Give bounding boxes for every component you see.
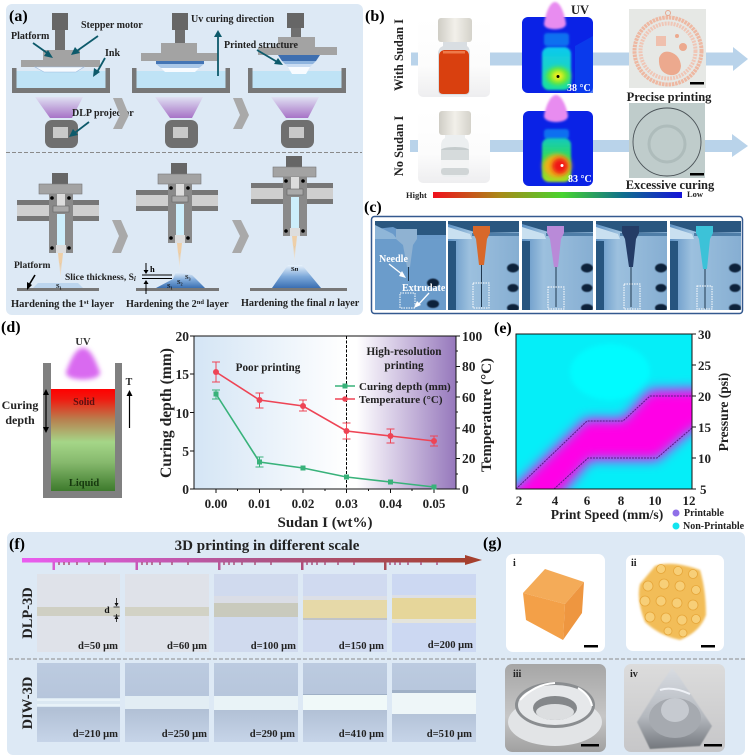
x axis labels bbox=[205, 496, 446, 511]
DIW printer layer 2: h bbox=[150, 264, 155, 274]
DIW annotations: Platform bbox=[14, 261, 50, 271]
curing vessel schematic: Liquid bbox=[69, 478, 99, 489]
method labels: DIW-3D bbox=[20, 677, 36, 729]
speed labels bbox=[516, 493, 696, 508]
y axis labels right: 60 bbox=[462, 390, 476, 405]
temperature color bar: Low bbox=[687, 189, 704, 199]
UV label: UV bbox=[571, 3, 589, 17]
y axis labels right: 0 bbox=[462, 482, 469, 497]
flow arrow with Sudan I bbox=[411, 47, 748, 71]
row labels: With Sudan I bbox=[392, 19, 406, 91]
precise print photo bbox=[629, 9, 706, 88]
DIW printer layer 2: S₂ bbox=[177, 279, 183, 286]
diameter labels: d=100 μm bbox=[251, 641, 296, 652]
panel label f: (f) bbox=[9, 536, 25, 553]
DLP printer stage 3 bbox=[248, 13, 346, 148]
pressure labels bbox=[698, 327, 712, 497]
y axis labels left bbox=[176, 329, 189, 497]
DIW printer layer 1 bbox=[17, 173, 99, 291]
photo i: orange cube: i bbox=[513, 558, 516, 569]
method labels bbox=[20, 587, 36, 729]
x axis labels: 0.03 bbox=[335, 496, 358, 511]
diameter labels bbox=[73, 640, 473, 740]
DLP printer stage 1 bbox=[12, 13, 110, 148]
panel label g: (g) bbox=[483, 535, 502, 552]
diameter labels: d=50 μm bbox=[78, 641, 118, 652]
y axis labels right: 40 bbox=[462, 421, 476, 436]
photo iv: clear cone bbox=[624, 664, 725, 752]
axis titles: Sudan I (wt%) bbox=[277, 515, 373, 531]
red vial photo bbox=[418, 18, 490, 97]
DLP annotations bbox=[11, 14, 299, 119]
chart legend bbox=[335, 381, 451, 406]
photo: orange needle bbox=[448, 221, 519, 312]
flow arrow no Sudan I bbox=[410, 134, 748, 157]
x axis labels: 0.00 bbox=[205, 496, 227, 511]
panel f: print resolution bbox=[9, 536, 482, 742]
y axis labels right: 80 bbox=[462, 359, 476, 374]
DIW printer layer 1: S₁ bbox=[56, 283, 62, 290]
pressure labels: 5 bbox=[700, 482, 707, 497]
speed labels: 10 bbox=[648, 493, 662, 508]
DLP printer stage 2 bbox=[132, 13, 230, 148]
panel label a: (a) bbox=[9, 8, 28, 25]
process chevrons bbox=[112, 98, 249, 253]
diameter labels: d=510 μm bbox=[427, 729, 472, 740]
panel a: DLP and DIW printing process bbox=[6, 4, 363, 315]
photo: clear needle: Extrudate bbox=[402, 283, 446, 294]
heatmap legend bbox=[672, 508, 745, 532]
DIW annotations: st bbox=[84, 299, 89, 306]
photo ii: lattice cube bbox=[626, 555, 724, 651]
DLP annotations: Uv curing direction bbox=[191, 14, 275, 25]
x axis labels: 0.05 bbox=[423, 496, 446, 511]
DIW printer layer 2 bbox=[136, 163, 219, 294]
panel b: thermal comparison bbox=[365, 2, 748, 200]
DLP annotations: Printed structure bbox=[224, 40, 299, 51]
speed labels: 6 bbox=[584, 493, 591, 508]
diameter labels: d=200 μm bbox=[428, 640, 473, 651]
speed labels: 8 bbox=[618, 493, 625, 508]
DIW annotations: layer bbox=[204, 299, 229, 310]
chart legend: Temperature (°C) bbox=[359, 394, 443, 406]
DIW annotations: i bbox=[134, 275, 136, 283]
panel f and g background bbox=[7, 532, 745, 755]
photo: cyan needle bbox=[670, 221, 741, 312]
diameter labels: d=290 μm bbox=[250, 729, 295, 740]
temperature color bar bbox=[406, 189, 704, 200]
panel e: printable window heatmap bbox=[480, 320, 745, 532]
photo iv: clear cone: iv bbox=[630, 669, 638, 680]
heatmap axis ticks bbox=[692, 334, 696, 489]
heatmap axis titles: Print Speed (mm/s) bbox=[551, 507, 663, 523]
temperature color bar: Hight bbox=[406, 190, 427, 200]
DIW annotations: nd bbox=[197, 299, 204, 306]
panel label c: (c) bbox=[364, 199, 382, 216]
y axis labels right bbox=[462, 329, 482, 497]
diameter marker bbox=[104, 598, 120, 622]
photo: clear needle bbox=[375, 221, 446, 310]
speed labels: 12 bbox=[682, 493, 696, 508]
photo: purple needle bbox=[522, 221, 593, 312]
curing vessel schematic: Curing bbox=[2, 398, 38, 412]
y axis labels left: 20 bbox=[176, 329, 189, 344]
DLP annotations: Ink bbox=[105, 48, 120, 59]
y axis labels right: 100 bbox=[462, 329, 482, 344]
panel f title: 3D printing in different scale bbox=[175, 538, 360, 554]
diameter labels: d=150 μm bbox=[339, 641, 384, 652]
diameter marker: d bbox=[104, 606, 110, 616]
thermal image 38 C bbox=[522, 2, 593, 94]
DIW printer final layer bbox=[250, 156, 347, 291]
panel c: extrusion photos bbox=[364, 199, 742, 314]
y axis labels left: 15 bbox=[176, 367, 189, 382]
heatmap bbox=[516, 334, 692, 490]
precise printing caption: Precise printing bbox=[627, 90, 712, 104]
region labels bbox=[236, 346, 442, 374]
method labels: DLP-3D bbox=[20, 587, 36, 639]
y axis labels left: 10 bbox=[176, 406, 189, 421]
photo i: orange cube bbox=[506, 554, 605, 652]
DIW annotations bbox=[11, 261, 360, 310]
heatmap legend: Printable bbox=[684, 508, 725, 519]
panel d: curing depth bbox=[1, 319, 495, 531]
photo: dark blue needle bbox=[596, 221, 667, 312]
DIW printer final layer: Sn bbox=[291, 266, 299, 273]
curing vessel schematic: Solid bbox=[73, 397, 95, 408]
x axis labels: 0.02 bbox=[292, 496, 314, 511]
photo iii: clear ring: iii bbox=[513, 669, 522, 680]
photo ii: lattice cube: ii bbox=[631, 558, 637, 569]
y axis labels right: 20 bbox=[462, 451, 476, 466]
thermal image 38 C: 38 °C bbox=[567, 83, 591, 94]
DIW micrographs bbox=[37, 663, 476, 742]
speed labels: 4 bbox=[552, 493, 559, 508]
scale arrow bbox=[22, 555, 482, 570]
row labels: No Sudan I bbox=[392, 116, 406, 176]
axis titles: Curing depth (mm) bbox=[158, 348, 175, 478]
DIW printer layer 2: S₁ bbox=[167, 283, 173, 290]
DLP annotations: DLP projector bbox=[72, 108, 134, 119]
pressure labels: 30 bbox=[698, 327, 711, 342]
diameter labels: d=210 μm bbox=[73, 729, 118, 740]
axis titles bbox=[158, 348, 495, 531]
panel g: printed objects bbox=[483, 535, 725, 752]
DIW annotations: Hardening the 2 bbox=[126, 299, 197, 310]
DIW annotations: Slice thickness, S bbox=[65, 273, 134, 283]
DIW annotations: layer bbox=[89, 299, 114, 310]
photo iii: clear ring bbox=[505, 664, 606, 752]
annotation arrows bbox=[33, 30, 283, 137]
pressure axis title: Pressure (psi) bbox=[716, 373, 731, 451]
y axis labels left: 5 bbox=[182, 444, 189, 459]
panel label d: (d) bbox=[1, 319, 21, 336]
curing vessel schematic: depth bbox=[5, 413, 35, 427]
excessive curing photo bbox=[629, 103, 705, 178]
thermal image 83 C bbox=[523, 95, 593, 186]
x axis labels: 0.04 bbox=[379, 496, 402, 511]
pressure labels: 15 bbox=[698, 420, 712, 435]
curing vessel schematic: T bbox=[126, 377, 133, 388]
curing depth series bbox=[212, 390, 436, 490]
excessive curing caption: Excessive curing bbox=[626, 178, 715, 192]
region labels: Poor printing bbox=[236, 362, 301, 374]
pressure labels: 10 bbox=[698, 451, 711, 466]
pressure labels: 25 bbox=[698, 358, 712, 373]
DLP annotations: Stepper motor bbox=[81, 20, 143, 31]
region labels: High-resolution bbox=[366, 346, 442, 358]
clear vial photo bbox=[418, 110, 490, 183]
DIW annotations: Hardening the final n layer bbox=[241, 298, 360, 309]
speed labels: 2 bbox=[516, 493, 522, 508]
DIW annotations: Hardening the 1 bbox=[11, 299, 84, 310]
line chart bbox=[158, 329, 495, 531]
x axis labels: 0.01 bbox=[248, 496, 271, 511]
region labels: printing bbox=[384, 360, 424, 372]
panel label e: (e) bbox=[494, 320, 512, 337]
diameter labels: d=250 μm bbox=[162, 729, 207, 740]
DLP micrographs bbox=[37, 574, 476, 652]
chart legend: Curing depth (mm) bbox=[359, 381, 451, 393]
heatmap legend: Non-Printable bbox=[683, 521, 745, 532]
photo: clear needle: Needle bbox=[379, 254, 408, 265]
DIW printer layer 2: S₃ bbox=[185, 274, 191, 281]
diameter labels: d=410 μm bbox=[339, 729, 384, 740]
curing vessel schematic bbox=[2, 337, 133, 498]
axis titles: Temperature (°C) bbox=[479, 358, 495, 472]
curing vessel schematic: UV bbox=[75, 337, 91, 348]
DLP annotations: Platform bbox=[11, 31, 50, 42]
pressure labels: 20 bbox=[698, 389, 711, 404]
temperature series bbox=[212, 362, 438, 446]
diameter labels: d=60 μm bbox=[167, 641, 207, 652]
panel label b: (b) bbox=[365, 8, 385, 25]
y axis labels left: 0 bbox=[182, 482, 189, 497]
row labels bbox=[392, 19, 406, 176]
thermal image 83 C: 83 °C bbox=[568, 174, 592, 185]
